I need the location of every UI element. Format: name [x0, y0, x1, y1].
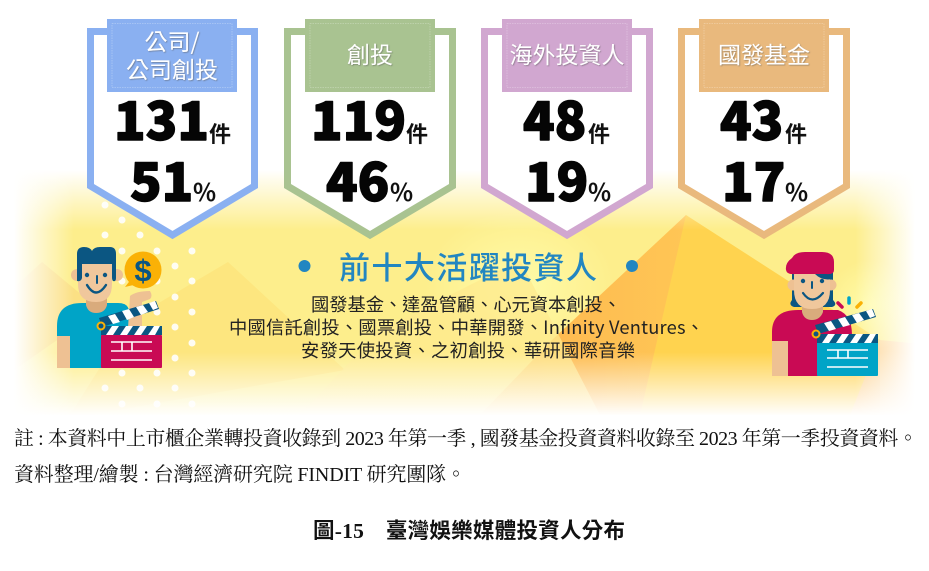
value: 131 cases: 131: [114, 80, 209, 155]
beret: [786, 252, 834, 274]
value: 119 cases: 119: [311, 80, 406, 155]
clapper board: [101, 335, 162, 368]
value: 131 cases: 件: [209, 117, 231, 149]
tab: national development fund: [699, 19, 829, 92]
value: 19 percent: 19: [525, 141, 588, 216]
clapper arm: [99, 301, 159, 327]
tab: overseas investors: [502, 19, 632, 92]
value: 19 percent: %: [588, 173, 611, 208]
panel: corporate investors: [90, 19, 254, 235]
hair: [77, 247, 116, 281]
clapper board: [817, 342, 878, 376]
icon: investor man with clapperboard: $: [134, 253, 152, 288]
torso: [57, 303, 129, 368]
value: 51 percent: 51: [130, 141, 193, 216]
figure caption: 圖-15 臺灣娛樂媒體投資人分布: [313, 519, 625, 543]
dollar bubble: [124, 252, 162, 288]
value: 17 percent: %: [785, 173, 808, 208]
value: 17 percent: 17: [722, 141, 785, 216]
tab: corporate: 公司創投: [126, 51, 218, 85]
torso: [772, 310, 852, 376]
panel: national development fund: [682, 19, 846, 235]
value: 43 cases: 件: [785, 117, 807, 149]
tab: corporate: [107, 19, 237, 92]
face: [788, 280, 798, 290]
tab: corporate: 公司/: [144, 23, 200, 57]
hair: [790, 272, 835, 307]
value: 46 percent: %: [390, 173, 413, 208]
tab: venture capital: 創投: [347, 36, 393, 70]
value: 48 cases: 48: [523, 80, 586, 155]
source note: 資料整理/繪製 : 台灣經濟研究院 FINDIT 研究團隊。: [14, 463, 466, 486]
icon: investor man with clapperboard: [57, 247, 162, 368]
value: 48 cases: 件: [588, 117, 610, 149]
icon: investor woman with clapperboard: [772, 252, 878, 376]
face: [71, 269, 83, 281]
tab: overseas investors: 海外投資人: [510, 36, 624, 70]
panel: venture capital: [288, 19, 452, 235]
text block: investor list: [229, 291, 704, 363]
text block: investor list: 安發天使投資、之初創投、華研國際音樂: [301, 337, 635, 363]
clapper arm: [815, 309, 876, 334]
sparks: [838, 303, 842, 307]
text block: investor list: 國發基金、達盈管顧、心元資本創投、: [311, 291, 621, 317]
heading: top ten active investors: 前十大活躍投資人: [339, 243, 597, 288]
value: 119 cases: 件: [406, 117, 428, 149]
panel: overseas investors: [484, 19, 650, 235]
hand: [128, 291, 152, 328]
value: 51 percent: %: [193, 173, 216, 208]
decorative dot column: [102, 202, 196, 408]
value: 46 percent: 46: [326, 141, 389, 216]
text block: investor list: 中國信託創投、國票創投、中華開發、Infinity Ventures、: [229, 314, 704, 340]
tab: venture capital: [305, 19, 435, 92]
value: 43 cases: 43: [720, 80, 783, 155]
footnote: 註 : 本資料中上市櫃企業轉投資收錄到 2023 年第一季 , 國發基金投資資料收錄至 2023 年第一季投資資料。: [14, 427, 918, 450]
background: yellow mountain banner: [0, 170, 929, 416]
tab: national development fund: 國發基金: [718, 36, 810, 70]
